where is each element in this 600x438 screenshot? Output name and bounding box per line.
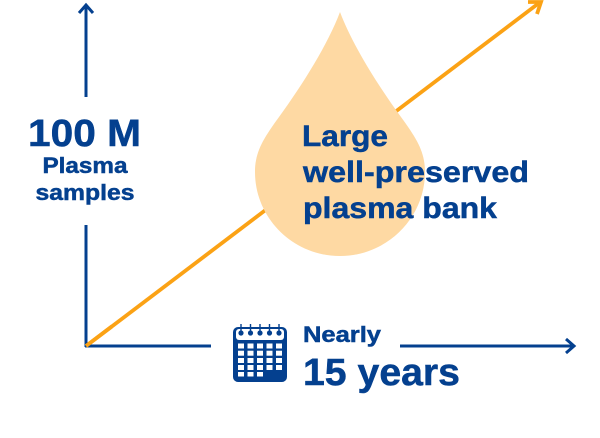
drop label: large well-preserved plasma bank: well-preserved	[302, 156, 529, 189]
orange line origin overlap	[86, 326, 112, 346]
drop label: large well-preserved plasma bank	[302, 120, 529, 225]
vertical axis arrow	[79, 5, 93, 347]
orange growth arrow	[86, 2, 541, 346]
y axis label: 100 M plasma samples: Plasma	[42, 153, 128, 178]
y axis label: 100 M plasma samples	[28, 113, 141, 205]
plasma drop	[255, 12, 425, 256]
x axis label: nearly 15 years: Nearly	[303, 322, 382, 347]
drop label: large well-preserved plasma bank: Large	[302, 120, 388, 153]
y axis label: 100 M plasma samples: 100 M	[28, 113, 141, 155]
x axis label: nearly 15 years	[303, 322, 460, 394]
horizontal axis arrow	[85, 339, 574, 353]
drop label: large well-preserved plasma bank: plasma bank	[303, 192, 497, 225]
icon: calendar	[233, 324, 287, 382]
x axis label: nearly 15 years: 15 years	[303, 352, 460, 394]
y axis label: 100 M plasma samples: samples	[36, 180, 134, 205]
